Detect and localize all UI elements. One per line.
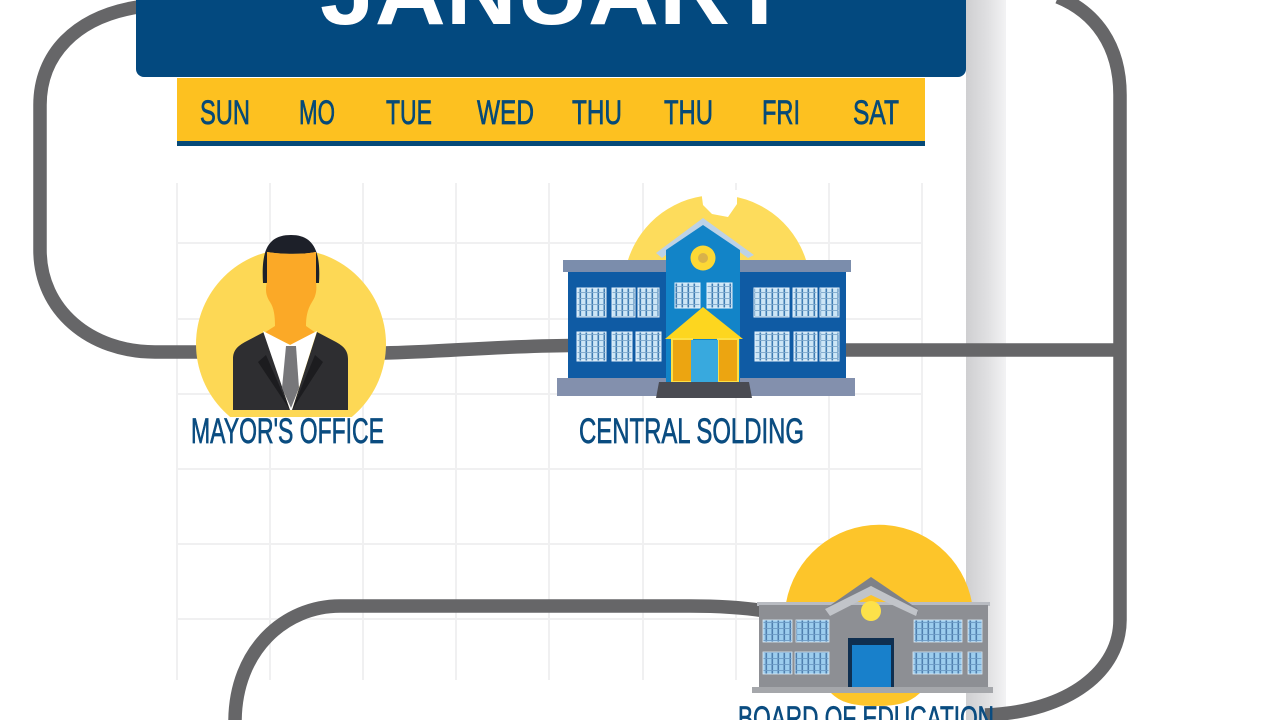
weekday bar (177, 78, 925, 146)
icon: blue school building (557, 190, 855, 398)
label: MAYOR'S OFFICE (191, 412, 384, 451)
weekday bar: TUE (386, 94, 432, 132)
calendar page edge (966, 0, 1006, 720)
weekday bar: THU (664, 94, 713, 132)
calendar header: January (136, 0, 966, 77)
icon: mayor portrait (196, 235, 386, 417)
weekday bar: FRI (762, 94, 800, 132)
weekday bar: THU (572, 94, 622, 132)
weekday bar: SAT (853, 94, 899, 132)
label: CENTRAL SOLDING (579, 412, 804, 451)
node: central building (557, 190, 855, 451)
icon: grey school building (752, 525, 993, 706)
weekday bar: MO (299, 94, 335, 132)
weekday bar: WED (477, 94, 534, 132)
node: board of education (738, 525, 994, 720)
weekday bar: SUN (200, 94, 250, 132)
node: mayor's office (191, 235, 386, 451)
